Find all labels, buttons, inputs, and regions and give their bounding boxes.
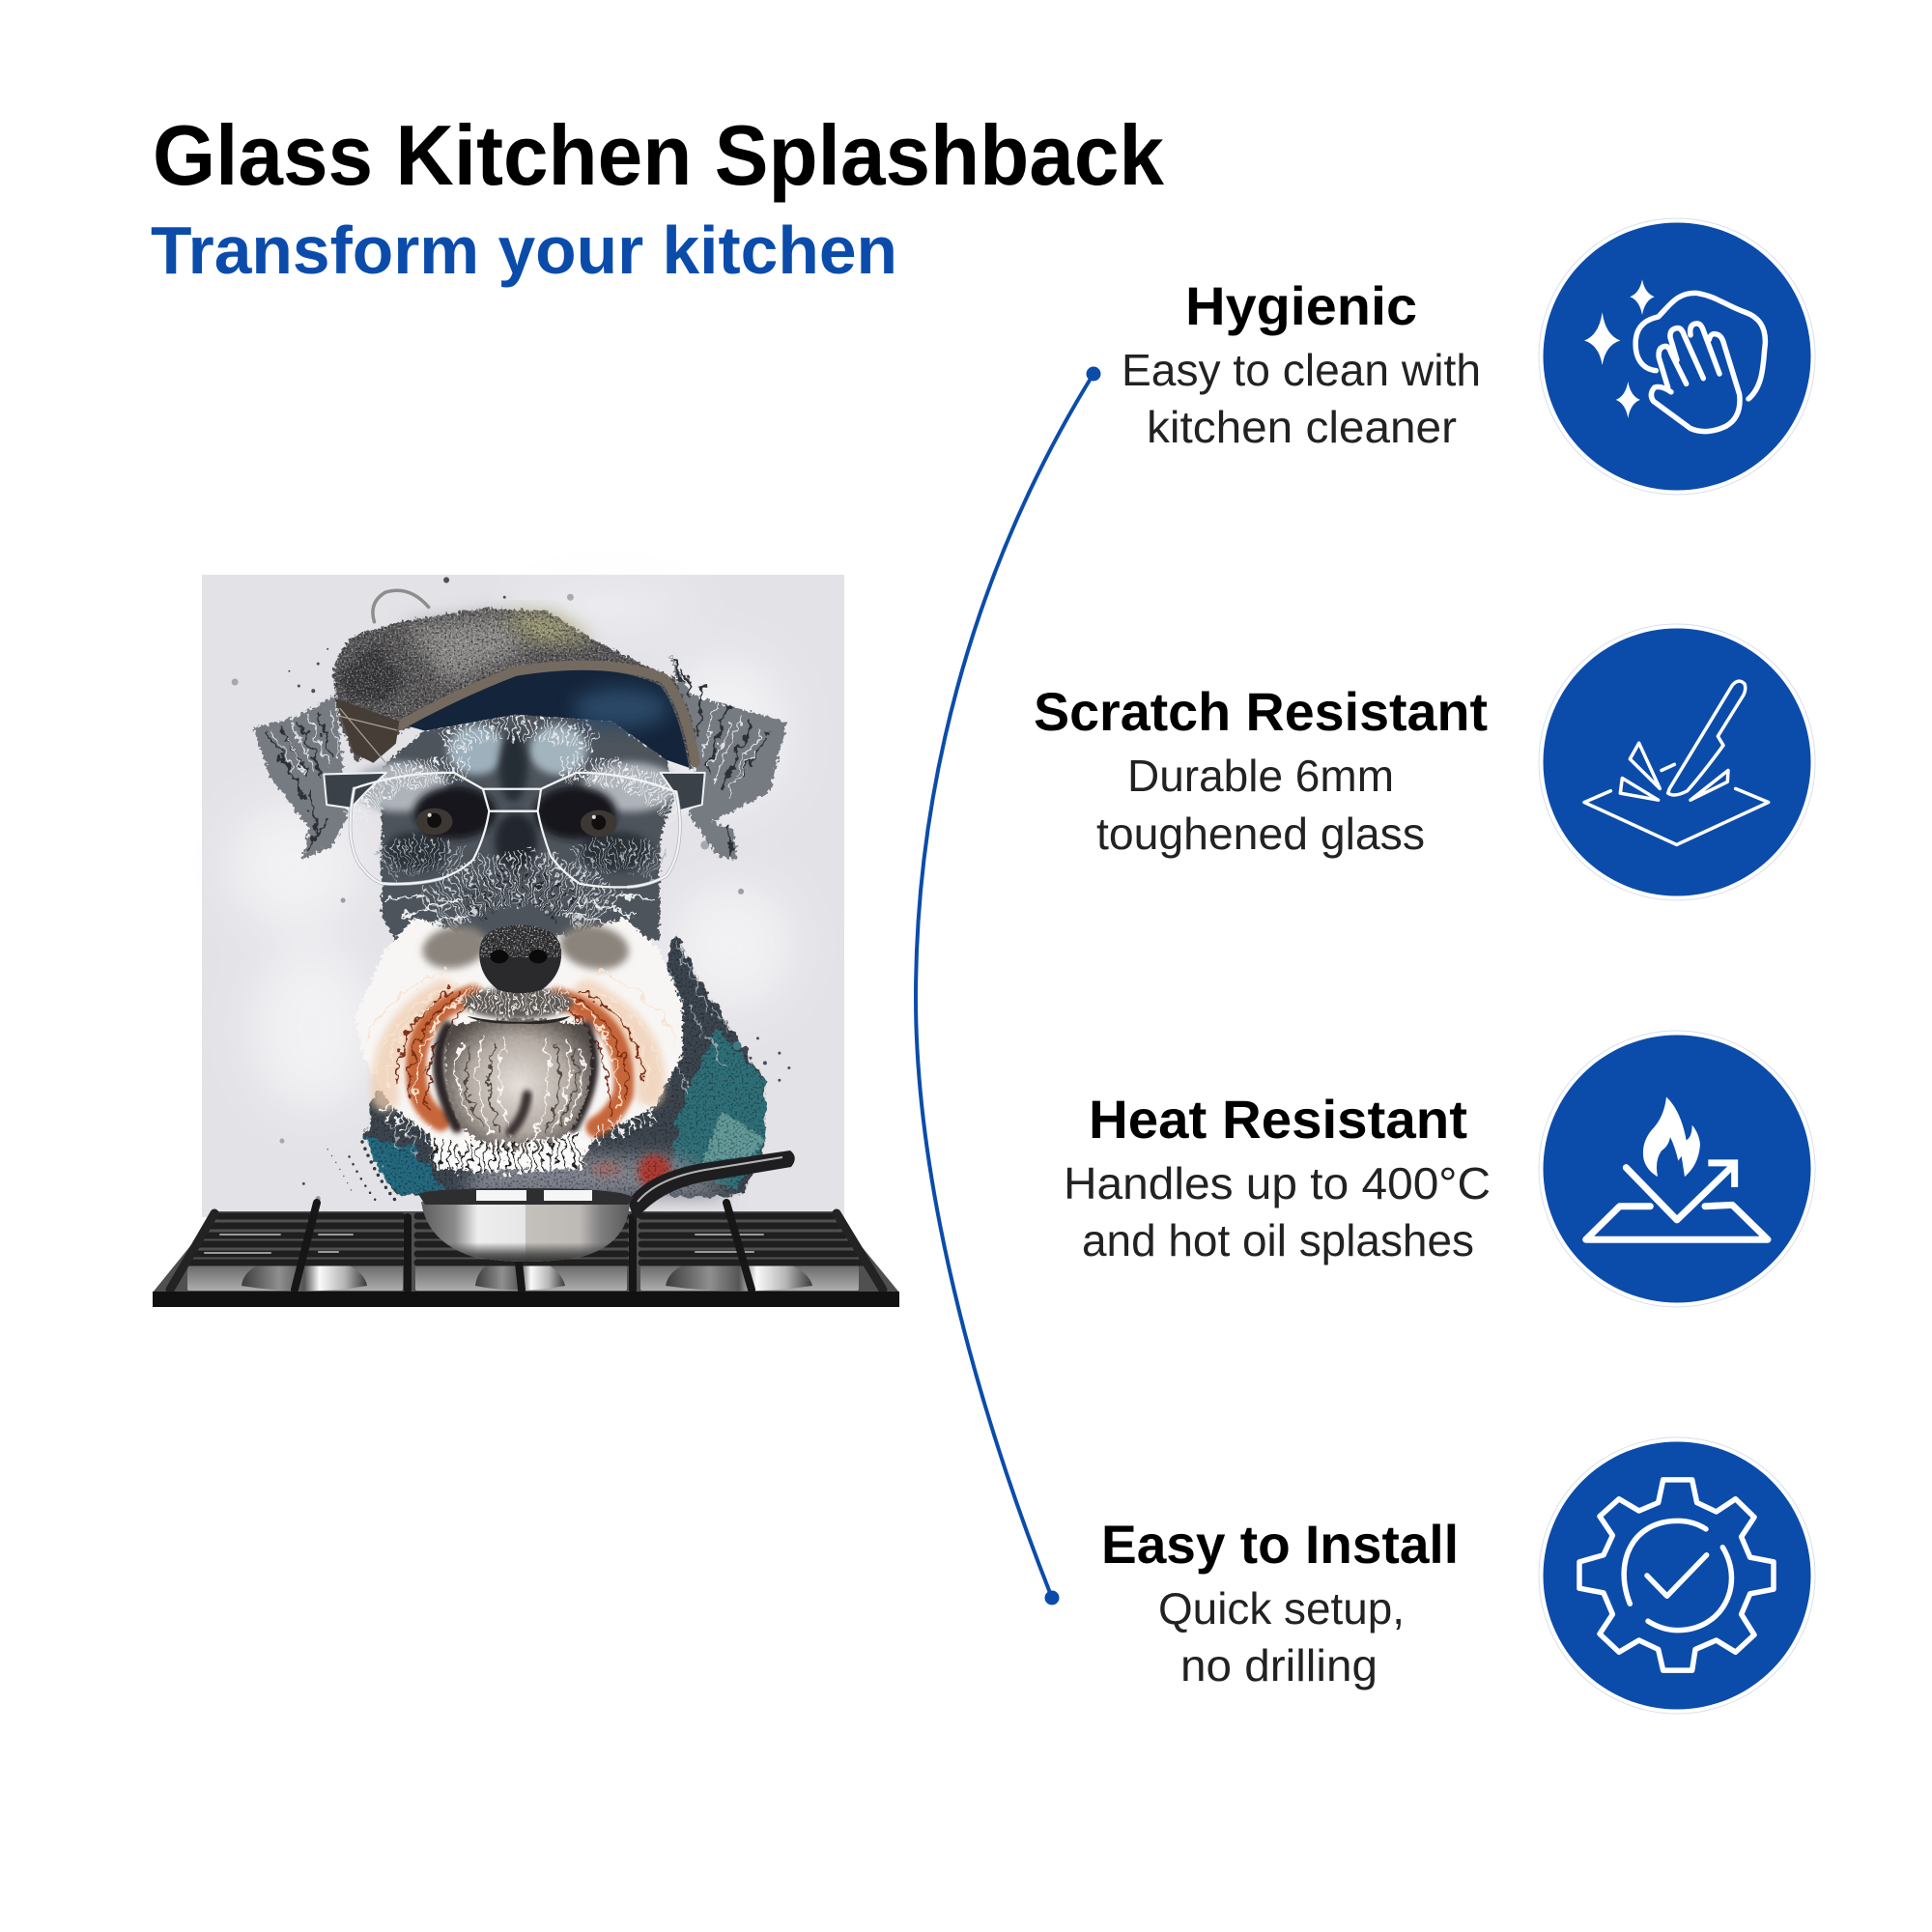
front edge: [153, 1292, 899, 1307]
feature text: scratch resistant: Durable 6mm: [1127, 751, 1394, 801]
feature text: easy to install: [1101, 1514, 1459, 1690]
feature text: hygienic: Easy to clean with: [1122, 345, 1481, 395]
cooktop base: [153, 1211, 899, 1293]
feature text: heat resistant: and hot oil splashes: [1082, 1215, 1474, 1265]
right ear: [669, 653, 786, 860]
temple arms: [324, 773, 705, 811]
cap underside: [402, 669, 689, 768]
feature text: hygienic: Hygienic: [1185, 275, 1417, 336]
icon: hand wiping with sparkles: [1539, 218, 1815, 495]
feature text: easy to install: Quick setup,: [1158, 1583, 1405, 1634]
paint splatter: [232, 577, 790, 1204]
dog illustration: [227, 577, 794, 1204]
pan rim: [418, 1188, 634, 1205]
connector arc: [916, 367, 1101, 1605]
mouth and muzzle strands: [462, 987, 573, 1024]
cap strap loop: [373, 590, 429, 622]
left ear: [253, 696, 348, 860]
product image: splashback on cooktop: [153, 575, 899, 1307]
icon: gear with check mark: [1539, 1437, 1815, 1714]
glasses: [324, 773, 705, 887]
pan bowl: [421, 1202, 630, 1262]
peach outer wash: [385, 994, 443, 1097]
burners: [242, 1264, 812, 1291]
nose: [476, 923, 563, 993]
grates: [170, 1203, 883, 1290]
dark inner edge: [439, 1027, 457, 1127]
beard: [355, 918, 683, 1169]
pan: [418, 1151, 795, 1262]
feature text: heat resistant: [1064, 1089, 1491, 1265]
muzzle shadows: [419, 921, 491, 974]
cap: [330, 590, 700, 772]
feature text: scratch resistant: toughened glass: [1096, 809, 1425, 859]
brows and forehead: [352, 725, 678, 816]
cooktop: [153, 1203, 899, 1307]
head fur: [382, 715, 677, 950]
eyes: [416, 809, 617, 837]
centre beard: [445, 1018, 592, 1151]
icon: knife scratching glass: [1539, 624, 1815, 900]
title: Glass Kitchen Splashback: [153, 107, 1165, 203]
feature text: easy to install: Easy to Install: [1101, 1514, 1459, 1575]
pan handle: [628, 1151, 795, 1221]
glass surface: [187, 1265, 859, 1291]
feature text: hygienic: kitchen cleaner: [1147, 402, 1457, 452]
dog body: [361, 930, 770, 1201]
feature text: scratch resistant: [1034, 681, 1488, 859]
background glow: [227, 590, 794, 1112]
cheek and snout strands: [385, 854, 659, 927]
feature text: heat resistant: Heat Resistant: [1089, 1089, 1467, 1150]
bottom fringe: [385, 1107, 655, 1157]
feature text: heat resistant: Handles up to 400°C: [1064, 1158, 1491, 1208]
cap brim: [400, 666, 696, 762]
feature text: easy to install: no drilling: [1180, 1640, 1378, 1690]
eye patches: [384, 786, 653, 870]
feature text: hygienic: [1122, 275, 1481, 452]
orange whisker bands: [415, 995, 473, 1121]
icon: flame on heat-resistant surface: [1539, 1031, 1815, 1307]
splashback panel background: [202, 575, 844, 1217]
subtitle: Transform your kitchen: [151, 213, 897, 288]
feature text: scratch resistant: Scratch Resistant: [1034, 681, 1488, 742]
